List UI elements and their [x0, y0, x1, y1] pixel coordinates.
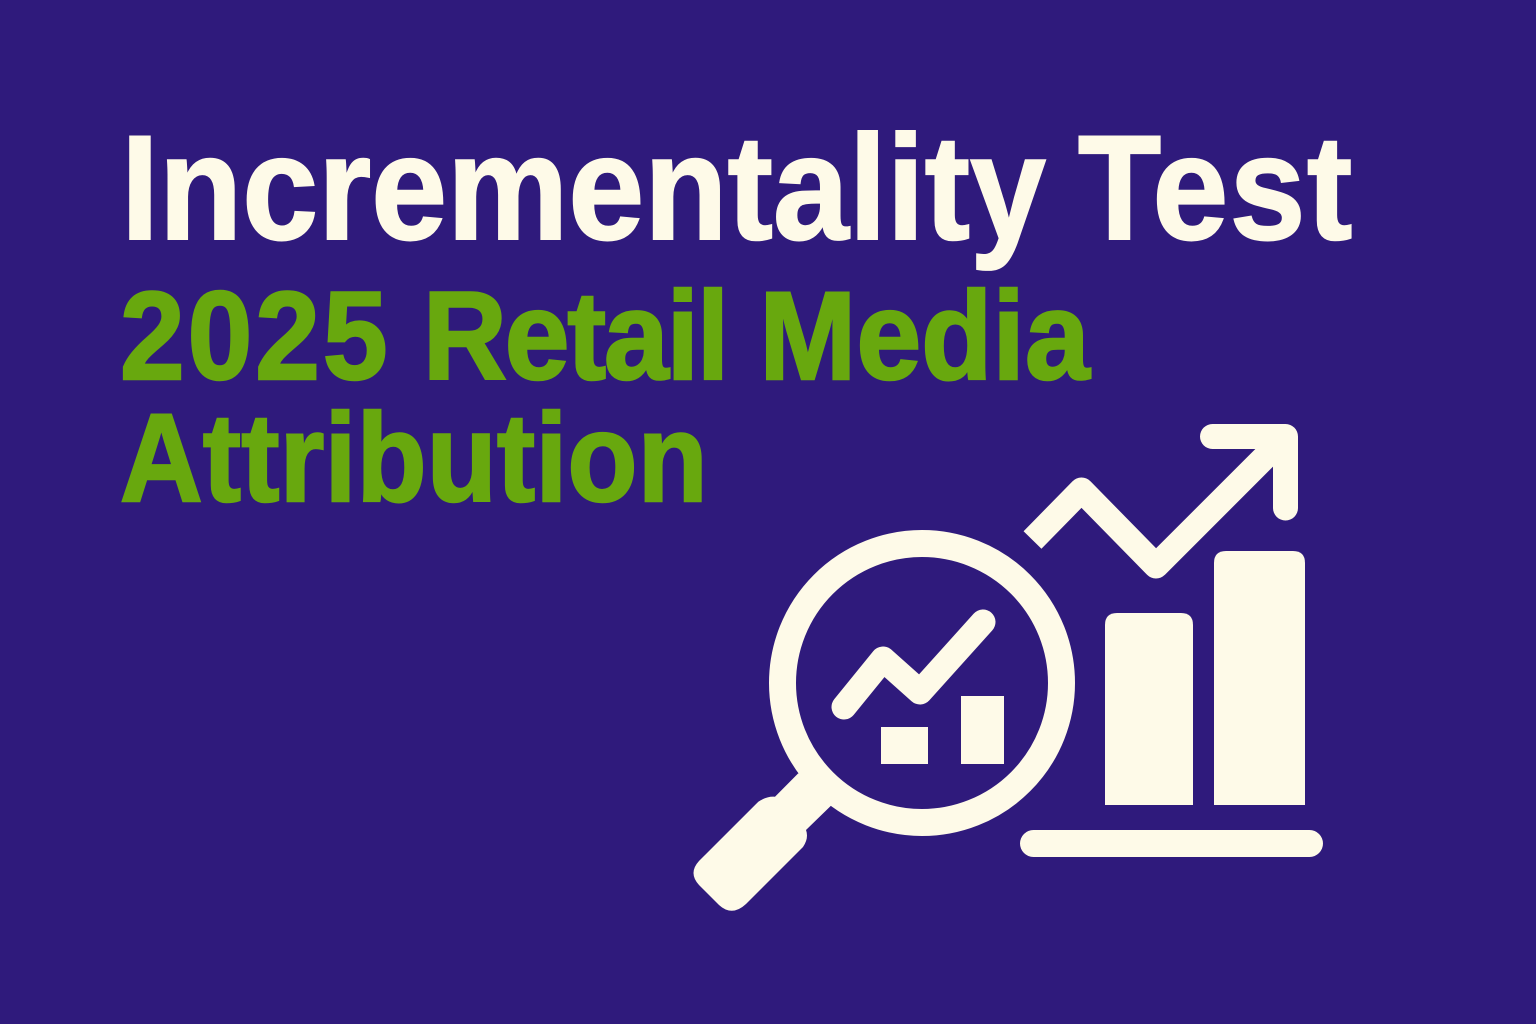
- title: Incrementality Test: [121, 104, 1354, 271]
- subtitle line 1: 2025 Retail Media: [120, 267, 1090, 406]
- bar: tall: [1214, 551, 1305, 805]
- bar: medium: [1105, 613, 1193, 805]
- lens small bar: [881, 727, 928, 764]
- subtitle line 2: Attribution: [120, 389, 708, 528]
- magnifier handle: [694, 773, 832, 911]
- lens taller bar: [961, 696, 1004, 764]
- magnifier lens: [782, 544, 1062, 822]
- chart baseline: [1020, 830, 1323, 857]
- icon: rising arrow: [1032, 436, 1286, 566]
- lens mini line chart: [844, 622, 983, 707]
